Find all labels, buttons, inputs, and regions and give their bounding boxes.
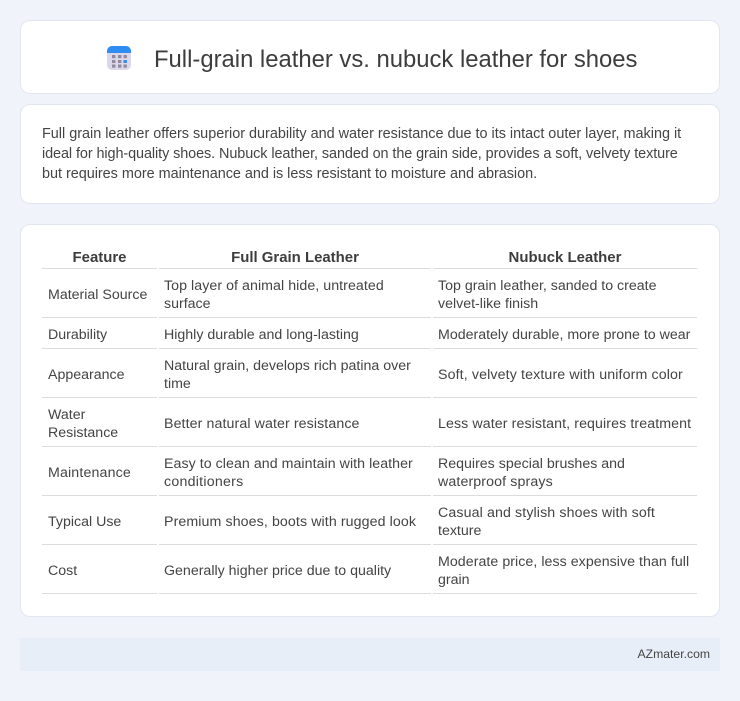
comparison table: Durability: [48, 327, 107, 343]
comparison table: Requires special brushes and: [438, 456, 625, 472]
footer bar: [20, 638, 720, 671]
comparison table: Typical Use: [48, 514, 121, 530]
title card: [20, 20, 720, 94]
comparison table: Generally higher price due to quality: [164, 563, 391, 579]
summary text: Full grain leather offers superior durability and water resistance due to its intact outer layer, making it: [42, 126, 681, 142]
summary card: [20, 104, 720, 204]
comparison table: conditioners: [164, 474, 244, 490]
comparison table: velvet-like finish: [438, 296, 538, 312]
comparison table: Cost: [48, 563, 77, 579]
row: Cost: [48, 554, 689, 588]
row: Maintenance: [48, 456, 625, 490]
comparison table: time: [164, 376, 191, 392]
comparison table: Better natural water resistance: [164, 416, 360, 432]
comparison table: Appearance: [48, 367, 125, 383]
summary text: but requires more maintenance and is less resistant to moisture and abrasion.: [42, 166, 537, 182]
comparison table: Material Source: [48, 287, 147, 303]
comparison table: Soft, velvety texture with uniform color: [438, 367, 683, 383]
header: Full Grain Leather: Full Grain Leather: [231, 249, 359, 266]
summary text: [42, 126, 682, 182]
comparison table: surface: [164, 296, 211, 312]
comparison table: Easy to clean and maintain with leather: [164, 456, 413, 472]
row: Durability: [48, 327, 690, 343]
comparison table: texture: [438, 523, 481, 539]
comparison table: waterproof sprays: [438, 474, 553, 490]
comparison table: Top layer of animal hide, untreated: [164, 278, 384, 294]
summary text: ideal for high-quality shoes. Nubuck leather, sanded on the grain side, provides a soft, velvety texture: [42, 146, 678, 162]
row: Water Resistance: [48, 407, 691, 441]
comparison table: Less water resistant, requires treatment: [438, 416, 691, 432]
row: Material Source: [48, 278, 656, 312]
icon: calendar: [107, 46, 131, 70]
header: Nubuck Leather: Nubuck Leather: [509, 249, 621, 266]
comparison table: Top grain leather, sanded to create: [438, 278, 656, 294]
comparison table: Premium shoes, boots with rugged look: [164, 514, 416, 530]
comparison table: grain: [438, 572, 470, 588]
footer credit: AZmater.com: [638, 647, 710, 661]
row: Appearance: [48, 358, 683, 392]
comparison table: Resistance: [48, 425, 118, 441]
comparison table: Water: [48, 407, 85, 423]
comparison table: Highly durable and long-lasting: [164, 327, 359, 343]
table card: [20, 224, 720, 617]
row: Typical Use: [48, 505, 655, 539]
comparison table: Natural grain, develops rich patina over: [164, 358, 411, 374]
comparison table: Casual and stylish shoes with soft: [438, 505, 655, 521]
header: Feature: Feature: [73, 249, 126, 266]
title: Full-grain leather vs. nubuck leather for shoes: [154, 46, 637, 73]
comparison table: Maintenance: [48, 465, 131, 481]
comparison table: Moderately durable, more prone to wear: [438, 327, 690, 343]
comparison table: Moderate price, less expensive than full: [438, 554, 689, 570]
